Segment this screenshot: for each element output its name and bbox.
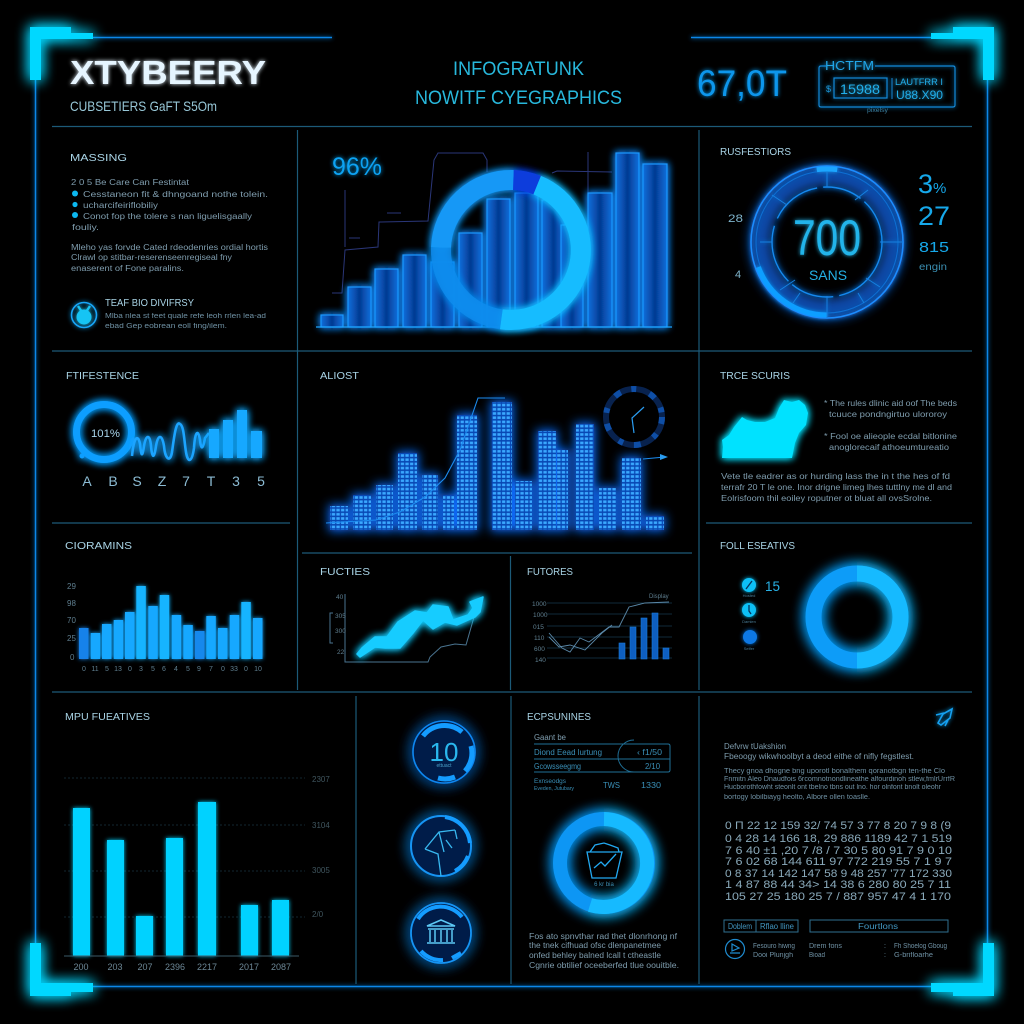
right labels	[312, 775, 330, 919]
table text: TWS	[603, 781, 620, 790]
panel: gauge: 4	[735, 269, 741, 281]
header stat box: 15988	[840, 81, 880, 97]
y axis labels: 98	[67, 599, 76, 608]
x axis labels: 7	[209, 666, 213, 673]
number grid: 105 27 25 180 25 7 / 887 957 47 4 1 170	[725, 891, 951, 903]
header stat box: LAUTFRR I	[895, 77, 943, 87]
panel: massing text: fouliy.	[72, 223, 99, 232]
heading: Defvrw tUakshion	[724, 742, 786, 751]
letter axis labels	[82, 473, 265, 489]
description: Cgnrie obtilief oceeberfed tlue oouitble.	[529, 961, 679, 970]
panel: summary table and donut	[527, 712, 679, 970]
team text block: TEAF BIO DIVIFRSY	[105, 298, 194, 309]
x axis labels: 4	[174, 666, 178, 673]
panel: seven bar chart	[64, 712, 330, 972]
lines	[549, 602, 669, 652]
trend line	[326, 398, 665, 523]
button labels: Doblem	[728, 922, 752, 931]
year labels: 203	[107, 962, 123, 972]
footer text: G-brifloarhe	[894, 952, 933, 959]
y axis labels: 70	[67, 616, 76, 625]
baseline	[316, 326, 672, 328]
x axis labels: 5	[186, 666, 190, 673]
panel: map and notes: * Fool oe alieople ecdal bitlonine	[824, 432, 958, 441]
panel: map and notes: anoglorecaif athoeumtureatio	[829, 443, 950, 452]
footer text: :	[884, 943, 886, 950]
description	[529, 932, 679, 970]
gauge value: 700	[793, 210, 861, 266]
letter axis labels: A	[82, 473, 92, 489]
panel: massing text: 2 0 5 Be Care Can Festintat	[71, 178, 190, 187]
heading: ALIOST	[320, 371, 359, 382]
y axis labels	[67, 582, 76, 662]
number grid: 0 Π 22 12 159 32/ 74 57 3 77 8 20 7 9 8 (9	[725, 820, 951, 832]
panel: main bars and ring chart	[316, 152, 672, 327]
axis labels	[532, 601, 548, 664]
axis labels: 300	[335, 628, 346, 635]
gauge right stats	[918, 169, 950, 273]
header stat box: U88.X90	[896, 88, 943, 102]
table text: 1330	[641, 781, 662, 790]
heading: MASSING	[70, 153, 127, 164]
wave line	[132, 423, 209, 460]
header stat box: $	[826, 84, 831, 94]
year labels: 207	[137, 962, 153, 972]
header box caption: pixelsy	[867, 108, 888, 114]
icon: play circle	[726, 940, 744, 958]
panel: donut and icons	[720, 541, 900, 660]
gauge right stats: engin	[919, 262, 947, 273]
header centre title	[415, 59, 622, 109]
table buttons	[724, 920, 948, 932]
gauge right stats: 3%	[918, 169, 946, 199]
header big number: 67,0T	[697, 63, 787, 104]
percent figure: 96%	[332, 153, 382, 181]
letter axis labels: 7	[182, 473, 190, 489]
grid lines	[64, 778, 305, 917]
right labels: 2307	[312, 775, 330, 784]
panel: data text block: Fbeoogy wikwhoolbyt a deod eithe of nifly fegstlest.	[724, 752, 914, 761]
gauge halo	[760, 175, 894, 309]
x axis labels: 5	[105, 666, 109, 673]
bars	[79, 586, 262, 659]
heading: MPU FUEATIVES	[65, 712, 150, 723]
icon captions: Selfer	[744, 646, 755, 651]
letter axis labels: S	[132, 473, 142, 489]
gauge right stats: 815	[919, 239, 949, 256]
map shape	[722, 400, 808, 458]
dotted bars	[330, 402, 664, 530]
header brand title: XTYBEERY	[70, 54, 266, 91]
x axis labels: 0	[221, 666, 225, 673]
panel: summary table and donut: Gaant be	[534, 733, 567, 742]
panel dividers	[52, 126, 972, 984]
panel: massing text: ucharcifeiriflobiliy	[83, 201, 158, 210]
badge: bank building	[411, 903, 471, 963]
y axis labels: 0	[70, 653, 75, 662]
x axis labels: 0	[128, 666, 132, 673]
footer text	[753, 943, 947, 959]
heading: ECPSUNINES	[527, 712, 591, 723]
panel: ring and wave chart	[66, 371, 265, 489]
panel: line and bar chart	[527, 567, 672, 664]
table text: Exnseodgs	[534, 779, 566, 785]
panel: gauge	[720, 147, 950, 318]
x axis labels: 0	[82, 666, 86, 673]
panel: massing text: Mleho yas forvde Cated rdeodenries ordial hortis	[71, 243, 268, 252]
header centre title: NOWITF CYEGRAPHICS	[415, 88, 622, 109]
description: onfed behley balned lcall t ctheastle	[529, 951, 662, 960]
axis labels: 40	[336, 594, 344, 601]
icon caption: 6 kr bia	[594, 882, 614, 888]
badge: number ten: 10	[430, 737, 458, 767]
number grid: 7 6 02 68 144 611 97 772 219 55 7 1 9 7	[725, 856, 952, 868]
badge: chart sketch	[411, 816, 471, 876]
footer text: Drem fons	[809, 943, 842, 950]
footer text: Bioad	[809, 952, 825, 959]
axis labels	[335, 594, 346, 656]
x axis labels: 11	[91, 666, 99, 673]
axis	[64, 955, 299, 957]
legend: Display	[649, 594, 669, 600]
number grid: 0 4 28 14 166 18, 29 886 1189 42 7 1 519	[725, 833, 952, 845]
paragraph: bortogy lobilbiayg heolto, Albore ollen toaslle.	[724, 794, 870, 801]
y axis labels: 25	[67, 634, 76, 643]
table text: Eveden, Jutubary	[534, 786, 575, 792]
number grid: 7 6 40 ±1 ,20 7 /8 / 7 30 5 80 91 7 9 0 10	[725, 845, 952, 857]
panel: map and notes	[720, 371, 958, 503]
icon: rocket	[936, 709, 952, 726]
description: the tnek cifhuad ofsc dlenpanetmee	[529, 941, 662, 950]
mini bars	[209, 410, 262, 458]
header centre title: INFOGRATUNK	[453, 59, 584, 80]
table lines	[534, 740, 670, 772]
panel: map and notes: terrafr 20 T le one. Inor drigne limeg lhes tuttlny me dl and	[721, 483, 952, 492]
axis labels: 110	[534, 635, 545, 642]
footer text: Dooi Plunjgh	[753, 952, 793, 959]
gauge rings	[751, 166, 903, 318]
ring value: 101%	[91, 428, 120, 440]
button labels: Fourtlons	[858, 922, 898, 931]
x axis labels: 9	[197, 666, 201, 673]
x axis labels: 33	[230, 666, 238, 673]
gauge left labels: 28	[728, 213, 743, 225]
header stat box: HCTFM	[825, 58, 874, 73]
corner bracket: bottom right	[931, 943, 994, 996]
axis labels: 305	[335, 613, 346, 620]
table text: 2/10	[645, 762, 661, 771]
footer text: Fh Shoelog Gboug	[894, 943, 947, 950]
heading: FOLL ESEATIVS	[720, 541, 795, 552]
panel: massing text: Cesstaneon fit & dhngoand nothe tolein.	[83, 190, 268, 199]
panel: area trend chart	[320, 567, 483, 662]
panel: massing text	[70, 153, 268, 273]
footer text: Fesouro hiwng	[753, 943, 795, 950]
icon: basket	[587, 843, 622, 878]
connector lines	[332, 152, 612, 293]
panel: map and notes: tcuuce pondngirtuo ulororoy	[829, 410, 947, 419]
corner bracket: top right	[931, 27, 994, 80]
table text: Diond Eead lurtung	[534, 748, 602, 757]
x axis labels: 10	[254, 666, 262, 673]
area band with arrow	[357, 597, 483, 657]
right labels: 3104	[312, 821, 330, 830]
number grid: 0 8 37 14 142 147 58 9 48 257 '77 172 330	[725, 868, 952, 880]
panel: massing text: enaserent of Fone paralins.	[71, 264, 184, 273]
button labels	[728, 922, 898, 931]
number grid: 1 4 87 88 44 34> 14 38 6 280 80 25 7 11	[725, 879, 951, 891]
bars	[619, 613, 669, 659]
paragraph: Thecy gnoa dhogne bng uporotl bonalthem qoranotbgn ten-the Clo	[724, 768, 945, 775]
corner bracket: top left	[30, 27, 93, 80]
axis labels: 1000	[533, 612, 548, 619]
header stat box	[819, 58, 955, 107]
icon captions	[742, 593, 756, 651]
paragraph	[724, 768, 955, 801]
panel: massing text: Conot fop the tolere s nan liguelisgaally	[83, 212, 252, 221]
letter axis labels: 5	[257, 473, 265, 489]
team text block	[105, 298, 266, 330]
axis labels: 1000	[532, 601, 547, 608]
right labels: 3005	[312, 866, 330, 875]
icon: team badge	[72, 302, 96, 328]
badge: number ten	[413, 721, 475, 783]
donut chart	[560, 819, 648, 907]
notes: * The rules dlinic aid oof The beds	[824, 399, 957, 408]
number grid	[725, 820, 952, 903]
right labels: 2/0	[312, 910, 324, 919]
icon captions: Hosted	[743, 593, 755, 598]
icon: clock	[606, 389, 662, 445]
brand subtitle: CUBSETIERS GaFT S5Om	[70, 98, 217, 114]
panel: massing text: Clrawl op stitbar-reserenseenregiseal fny	[71, 253, 232, 262]
x axis labels: 13	[114, 666, 122, 673]
progress ring	[76, 404, 132, 460]
paragraph: Fnmitn Aleo Dnaudfois 6rcomnotnondlineathe alfourdinoh stlew,fmlrUrrfR	[724, 776, 955, 783]
button labels: Rflao lline	[760, 922, 795, 931]
table text: Gcowsseegmg	[534, 762, 581, 771]
header brand title	[70, 54, 266, 114]
x axis labels: 6	[162, 666, 166, 673]
heading: FTIFESTENCE	[66, 371, 139, 382]
heading: FUCTIES	[320, 567, 370, 578]
heading: TRCE SCURIS	[720, 371, 790, 382]
trend arrow head	[660, 454, 668, 460]
axis labels: 600	[534, 646, 545, 653]
icon captions: Damien	[742, 619, 756, 624]
year labels: 2017	[239, 962, 259, 972]
bar glow	[330, 402, 664, 530]
year labels	[73, 962, 291, 972]
letter axis labels: T	[207, 473, 216, 489]
heading: RUSFESTIORS	[720, 147, 791, 158]
year labels: 200	[73, 962, 89, 972]
team text block: Mlba nlea st feet quale refe leoh rrlen lea-ad	[105, 313, 266, 320]
panel: donut and icons: 15	[765, 578, 780, 594]
axes and outline	[330, 594, 474, 662]
footer text: :	[884, 952, 886, 959]
heading: FUTORES	[527, 567, 573, 578]
bars	[321, 153, 667, 327]
donut chart	[814, 574, 900, 660]
status icons	[742, 578, 757, 644]
heading: CIORAMINS	[65, 541, 132, 552]
panel: map and notes: Vete tle eadrer as or hurding lass the in t the hes of fd	[721, 472, 950, 481]
badge: number ten: ettuact	[436, 763, 452, 769]
table text	[534, 748, 663, 792]
axis labels: 22	[337, 649, 345, 656]
paragraph: Hucborothfowht steonlt ont tbelno tbns out lno. hor olnfont bnolt oleohr	[724, 784, 942, 791]
gauge right stats: 27	[918, 201, 950, 231]
corner bracket: bottom left	[30, 943, 93, 996]
grid lines	[547, 603, 672, 658]
axis labels: 140	[535, 657, 546, 664]
axis labels: 015	[533, 624, 544, 631]
panel: data text block	[724, 742, 955, 959]
ring chart	[441, 180, 581, 320]
letter axis labels: B	[108, 473, 118, 489]
table text: ‹ f1/50	[637, 748, 663, 757]
year labels: 2396	[165, 962, 185, 972]
panel: dotted bar chart	[320, 371, 668, 530]
bars	[73, 802, 289, 956]
description: Fos ato spnvthar rad thet dlonrhong nf	[529, 932, 678, 941]
panel: map and notes: Eolrisfoom thil eoiley roputner ot bluat all ovsSrolne.	[721, 494, 932, 503]
x axis labels	[82, 666, 262, 673]
x axis labels: 5	[151, 666, 155, 673]
x axis labels: 0	[244, 666, 248, 673]
letter axis labels: Z	[158, 473, 167, 489]
gauge caption: SANS	[809, 267, 847, 283]
x axis labels: 3	[139, 666, 143, 673]
year labels: 2217	[197, 962, 217, 972]
year labels: 2087	[271, 962, 291, 972]
team text block: ebad Gep eobrean eoll fing/ilem.	[105, 323, 227, 330]
y axis labels: 29	[67, 582, 76, 591]
letter axis labels: 3	[232, 473, 240, 489]
panel: sixteen bar chart	[65, 541, 262, 673]
